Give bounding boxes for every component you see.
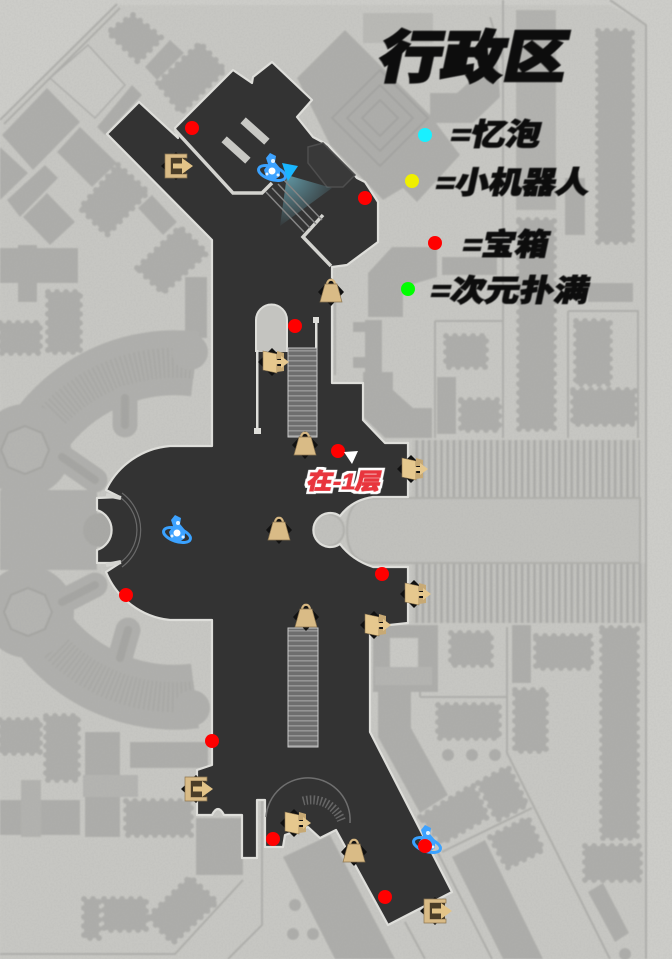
west niche caps <box>106 495 121 565</box>
curved staircase <box>266 778 350 823</box>
title: 行政区 <box>373 27 575 89</box>
north-east buildings <box>353 10 635 438</box>
icon: shop bag <box>292 431 318 459</box>
upper staircase <box>288 348 317 437</box>
icon: side door <box>397 455 428 483</box>
north stairs <box>266 180 322 232</box>
icon: memory bubble north <box>257 153 287 184</box>
icon: shop bag <box>266 516 292 544</box>
south-west buildings <box>0 716 243 943</box>
south-east buildings <box>373 625 640 959</box>
lower staircase <box>288 628 318 747</box>
icon: memory bubble south-east <box>412 825 442 856</box>
legend label: memory bubble: =忆泡 <box>448 118 545 152</box>
west niche arcs <box>118 493 141 567</box>
legend dot: piggy bank <box>401 282 415 296</box>
east room wall <box>303 215 331 266</box>
icon: player arrow <box>282 163 298 181</box>
callout: on floor -1: 在-1层 <box>305 469 384 494</box>
walkable dark floor <box>97 62 452 925</box>
icon: shop bag <box>318 278 344 306</box>
icon: exit door <box>161 152 193 180</box>
west rail <box>254 350 261 434</box>
icon: side door <box>258 348 289 376</box>
icon: memory bubble west <box>162 515 192 546</box>
treasure chest markers <box>119 121 432 904</box>
west plaza structure <box>0 334 210 726</box>
alcove octagon <box>308 143 355 187</box>
icon: shop bag <box>341 838 367 866</box>
east rail <box>313 317 319 350</box>
icon: shop bag <box>293 603 319 631</box>
interior details <box>106 117 355 823</box>
marker pointer <box>344 451 358 464</box>
icon: exit door <box>420 897 452 925</box>
view cone <box>280 175 332 226</box>
icon: side door <box>360 611 391 639</box>
legend dot: chest <box>428 236 442 250</box>
legend label: robot: =小机器人 <box>433 166 594 200</box>
legend <box>401 118 594 308</box>
legend label: chest: =宝箱 <box>460 227 553 262</box>
icon: side door <box>280 809 311 837</box>
top-left buildings <box>0 15 225 353</box>
rotunda building <box>297 30 460 202</box>
legend dot: robot <box>405 174 419 188</box>
north room wall <box>175 130 272 193</box>
legend label: piggy bank: =次元扑满 <box>428 274 593 308</box>
south-centre strip and trees <box>283 835 395 959</box>
icon: exit door <box>181 775 213 803</box>
legend dot: memory bubble <box>418 128 432 142</box>
east stepped bands <box>312 440 645 623</box>
icon: side door <box>400 580 431 608</box>
pillars <box>221 117 270 164</box>
capsule opening <box>256 304 287 352</box>
